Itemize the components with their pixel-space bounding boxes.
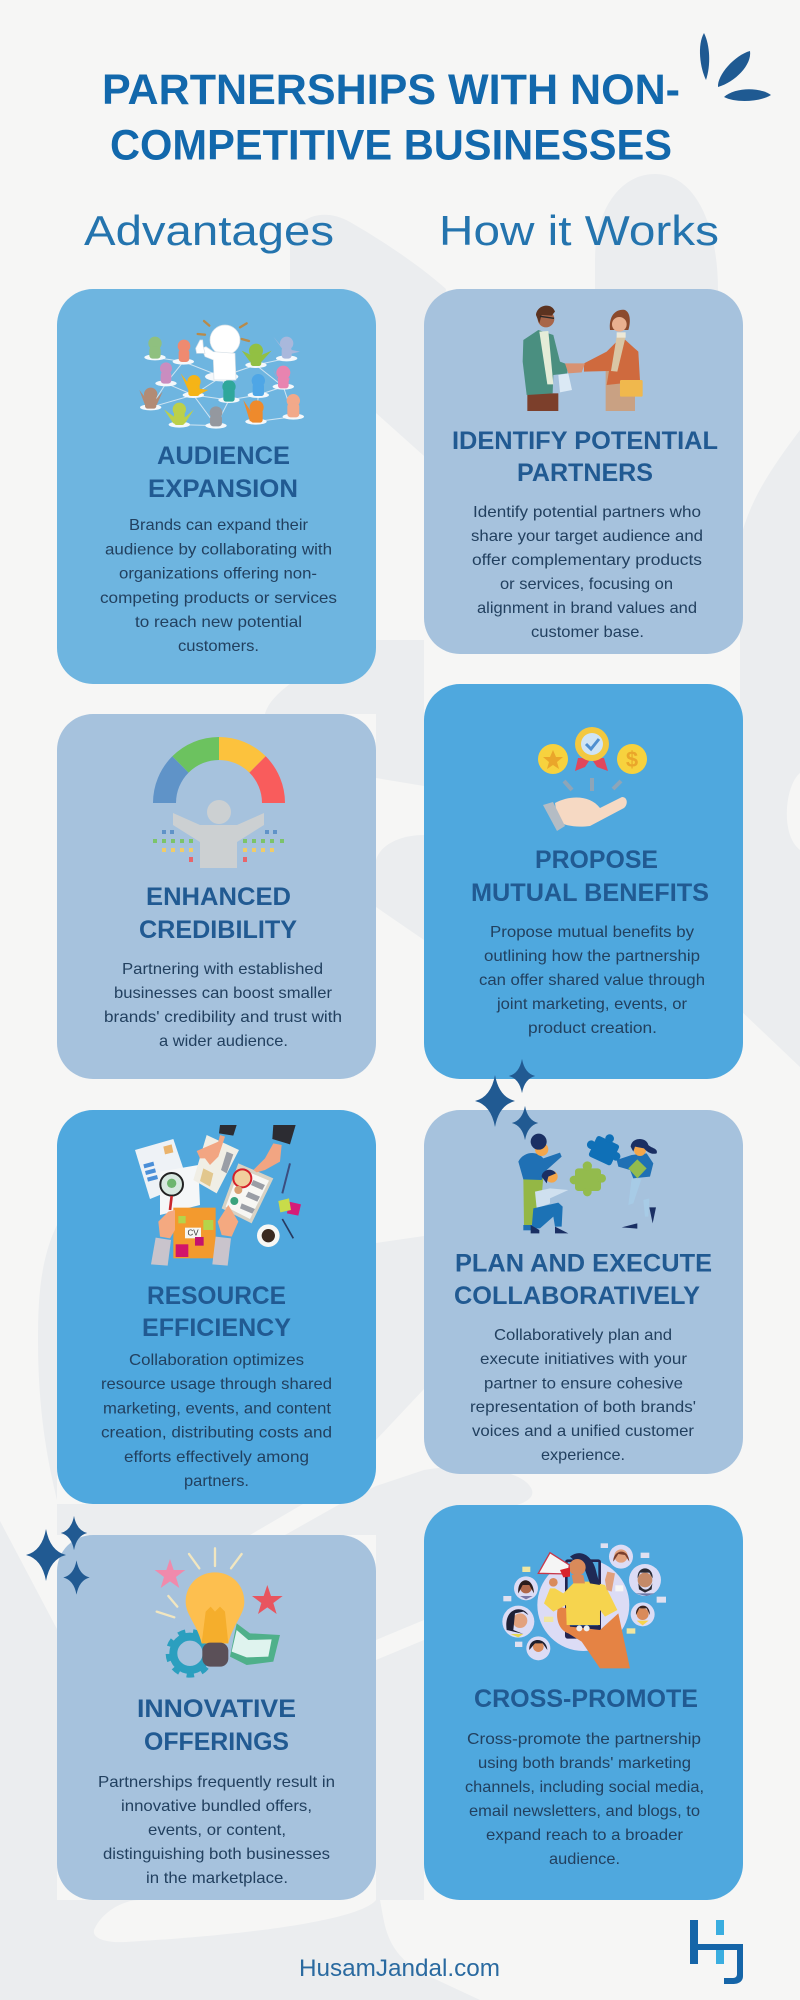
heading: INNOVATIVE bbox=[137, 1695, 296, 1723]
body text: creation, distributing costs and bbox=[101, 1424, 332, 1442]
heading: PARTNERS bbox=[517, 459, 653, 487]
body text: events, or content, bbox=[148, 1822, 286, 1839]
body text: Partnerships frequently result in bbox=[98, 1774, 335, 1791]
icon: credibility gauge bbox=[153, 737, 285, 868]
body text: audience by collaborating with bbox=[105, 542, 332, 558]
title bbox=[102, 66, 680, 170]
icon: team with puzzle pieces bbox=[518, 1127, 657, 1233]
panel: enhanced credibility bbox=[57, 714, 376, 1079]
body text: customer base. bbox=[531, 624, 644, 641]
panel: identify potential partners bbox=[424, 289, 743, 654]
icon: resumes and hands bbox=[135, 1125, 301, 1266]
heading: EFFICIENCY bbox=[142, 1314, 291, 1342]
body text: resource usage through shared bbox=[101, 1376, 332, 1393]
body text: product creation. bbox=[528, 1020, 657, 1037]
panel: innovative offerings bbox=[57, 1535, 376, 1900]
body text: distinguishing both businesses bbox=[103, 1846, 330, 1863]
body text: innovative bundled offers, bbox=[121, 1798, 312, 1815]
body text: Brands can expand their bbox=[129, 517, 309, 534]
heading bbox=[139, 883, 297, 944]
heading: how it works: How it Works bbox=[439, 207, 719, 254]
heading bbox=[471, 846, 709, 907]
panel: cross-promote bbox=[424, 1505, 743, 1900]
body text: representation of both brands' bbox=[470, 1399, 696, 1416]
heading: EXPANSION bbox=[148, 475, 298, 503]
heading: PLAN AND EXECUTE bbox=[455, 1250, 712, 1278]
heading bbox=[137, 1695, 296, 1756]
footer website: HusamJandal.com bbox=[299, 1955, 500, 1982]
body text: expand reach to a broader bbox=[486, 1827, 684, 1844]
body text: can offer shared value through bbox=[479, 972, 705, 989]
icon: sparkles right bbox=[475, 1059, 538, 1140]
body text: voices and a unified customer bbox=[472, 1423, 695, 1440]
panel: propose mutual benefits bbox=[424, 684, 743, 1079]
body text: customers. bbox=[178, 638, 259, 655]
body text: Collaboration optimizes bbox=[129, 1352, 304, 1369]
body text: offer complementary products bbox=[472, 552, 702, 569]
body text: experience. bbox=[541, 1447, 625, 1464]
icon: hand with coins: $ bbox=[626, 747, 638, 772]
heading: OFFERINGS bbox=[144, 1728, 289, 1756]
heading bbox=[142, 1282, 291, 1342]
body text bbox=[471, 504, 703, 641]
body text bbox=[465, 1731, 704, 1868]
body text: share your target audience and bbox=[471, 528, 703, 545]
body text: competing products or services bbox=[100, 590, 337, 607]
body text: Partnering with established bbox=[122, 961, 323, 978]
body text bbox=[479, 924, 705, 1037]
body text: businesses can boost smaller bbox=[114, 985, 333, 1002]
body text: in the marketplace. bbox=[146, 1870, 288, 1887]
panel: resource efficiency bbox=[57, 1110, 376, 1504]
icon: audience network bbox=[139, 321, 304, 429]
heading: CREDIBILITY bbox=[139, 916, 297, 944]
panel: plan and execute collaboratively bbox=[424, 1110, 743, 1474]
body text: using both brands' marketing bbox=[478, 1755, 691, 1772]
body text bbox=[101, 1352, 332, 1490]
body text: Propose mutual benefits by bbox=[490, 924, 694, 941]
body text bbox=[470, 1327, 696, 1464]
icon: handshake bbox=[523, 306, 643, 411]
title: COMPETITIVE BUSINESSES bbox=[110, 122, 672, 170]
title: PARTNERSHIPS WITH NON- bbox=[102, 66, 680, 114]
body text: audience. bbox=[549, 1851, 620, 1868]
icon: resumes and hands: CV bbox=[187, 1229, 199, 1238]
body text: partner to ensure cohesive bbox=[484, 1376, 683, 1392]
body text: channels, including social media, bbox=[465, 1779, 704, 1796]
body text: efforts effectively among bbox=[124, 1449, 309, 1466]
decorative leaves icon bbox=[700, 33, 771, 101]
body text: partners. bbox=[184, 1473, 249, 1490]
body text: a wider audience. bbox=[159, 1033, 288, 1050]
body text: outlining how the partnership bbox=[484, 948, 700, 965]
body text bbox=[100, 517, 337, 655]
heading: advantages: Advantages bbox=[84, 207, 334, 254]
body text bbox=[104, 961, 342, 1050]
heading bbox=[148, 442, 298, 503]
body text: email newsletters, and blogs, to bbox=[469, 1803, 700, 1820]
heading: RESOURCE bbox=[147, 1282, 286, 1310]
body text: brands' credibility and trust with bbox=[104, 1009, 342, 1026]
heading: IDENTIFY POTENTIAL bbox=[452, 427, 718, 455]
body text: to reach new potential bbox=[135, 614, 302, 631]
heading: MUTUAL BENEFITS bbox=[471, 879, 709, 907]
icon: sparkles left bbox=[26, 1516, 90, 1595]
body text bbox=[98, 1774, 335, 1887]
heading: ENHANCED bbox=[146, 883, 291, 911]
body text: Cross-promote the partnership bbox=[467, 1731, 701, 1748]
body text: alignment in brand values and bbox=[477, 600, 697, 617]
heading bbox=[452, 427, 718, 487]
heading: COLLABORATIVELY bbox=[454, 1282, 700, 1310]
heading: CROSS-PROMOTE bbox=[474, 1685, 698, 1713]
body text: or services, focusing on bbox=[500, 576, 673, 593]
icon: social promotion bbox=[502, 1543, 666, 1668]
logo: HJ bbox=[690, 1920, 743, 1984]
icon: hand with coins bbox=[538, 727, 647, 831]
heading bbox=[454, 1250, 712, 1310]
body text: organizations offering non- bbox=[119, 566, 317, 582]
heading: PROPOSE bbox=[535, 846, 658, 874]
body text: execute initiatives with your bbox=[480, 1351, 688, 1368]
icon: light bulb bbox=[155, 1548, 283, 1675]
body text: Identify potential partners who bbox=[473, 504, 701, 521]
body text: Collaboratively plan and bbox=[494, 1327, 672, 1344]
panel: audience expansion bbox=[57, 289, 376, 684]
heading: AUDIENCE bbox=[157, 442, 290, 470]
body text: marketing, events, and content bbox=[103, 1400, 332, 1418]
body text: joint marketing, events, or bbox=[496, 996, 688, 1013]
